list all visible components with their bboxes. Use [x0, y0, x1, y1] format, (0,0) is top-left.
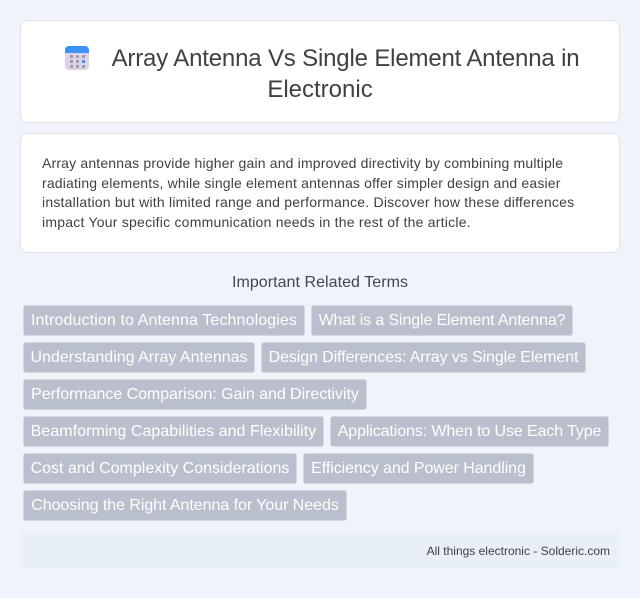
tag: Applications: When to Use Each Type	[338, 423, 601, 440]
tag	[23, 453, 297, 484]
tag	[261, 342, 586, 373]
tag: Understanding Array Antennas	[30, 349, 248, 366]
tag: Introduction to Antenna Technologies	[31, 312, 297, 329]
icon: calendar grid	[65, 46, 89, 70]
tag	[23, 416, 324, 447]
tag: Beamforming Capabilities and Flexibility	[31, 423, 316, 440]
footer	[20, 534, 620, 568]
heading: related terms: Important Related Terms	[232, 274, 408, 291]
summary text	[42, 155, 574, 230]
tag: Cost and Complexity Considerations	[31, 460, 289, 477]
tag	[330, 416, 609, 447]
title	[112, 45, 579, 103]
tag	[23, 342, 255, 373]
tag	[303, 453, 534, 484]
footer credit: All things electronic - Solderic.com	[427, 544, 610, 558]
tag: What is a Single Element Antenna?	[319, 312, 565, 329]
summary text: installation but with limited range and performance. Discover how these differences	[42, 194, 574, 210]
tag	[311, 305, 573, 336]
summary text: Array antennas provide higher gain and improved directivity by combining multiple	[42, 155, 563, 171]
summary text: radiating elements, while single element antennas offer simpler design and easier	[42, 175, 561, 191]
title: Array Antenna Vs Single Element Antenna in	[112, 45, 579, 72]
summary text: impact Your specific communication needs in the rest of the article.	[42, 214, 471, 230]
tag: Performance Comparison: Gain and Directivity	[31, 386, 359, 403]
tag	[23, 379, 367, 410]
title: Electronic	[267, 76, 373, 103]
tag: Design Differences: Array vs Single Element	[269, 349, 578, 366]
panel: title card	[20, 20, 620, 123]
tag	[23, 305, 305, 336]
tag: Efficiency and Power Handling	[311, 460, 526, 477]
tag	[23, 490, 347, 521]
tag: Choosing the Right Antenna for Your Needs	[31, 497, 339, 514]
panel: summary card	[20, 133, 620, 253]
panel: related term tags	[23, 305, 609, 521]
